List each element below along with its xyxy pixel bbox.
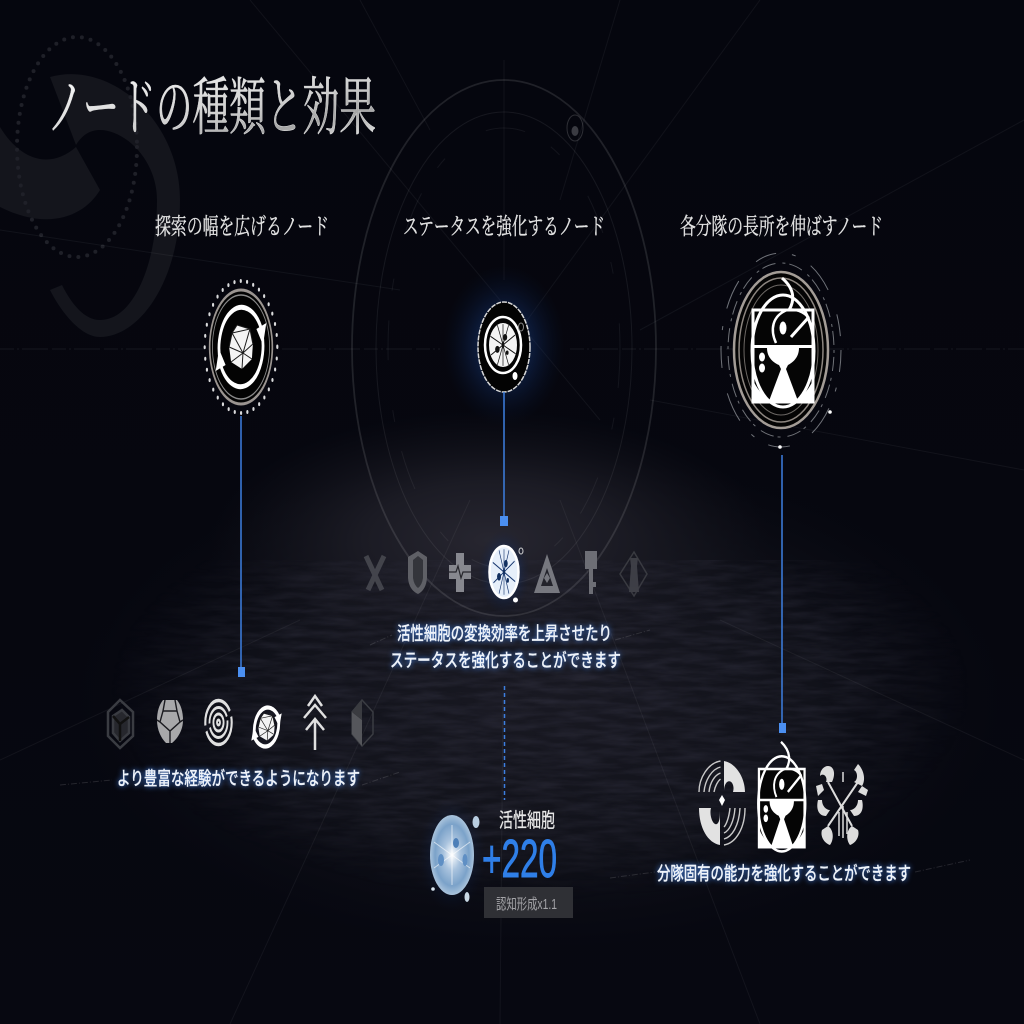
icon: status node — [444, 266, 564, 426]
text: status description: 活性細胞の変換効率を上昇させたり — [397, 623, 612, 644]
icon: selected compass — [478, 530, 530, 614]
text: status description: ステータスを強化することができます — [390, 650, 621, 671]
value: +220: +220 — [482, 829, 557, 889]
text: exploration description: より豊富な経験ができるようになります — [117, 768, 360, 789]
badge: cognition multiplier: 認知形成x1.1 — [496, 896, 557, 913]
badge: cognition multiplier — [484, 887, 573, 918]
background — [142, 437, 938, 892]
icon: exploration node — [205, 281, 277, 413]
icon: triangle eye — [534, 554, 560, 593]
icon: cycle polyhedron — [251, 708, 282, 746]
decorative swirl emblem — [0, 37, 180, 337]
heading: exploration nodes: 探索の幅を広げるノード — [155, 214, 329, 239]
icon: crossed curls — [816, 764, 868, 845]
connector: status — [500, 392, 508, 526]
text: squad description: 分隊固有の能力を強化することができます — [657, 863, 911, 884]
icon row: squad — [699, 742, 868, 851]
icon: hex box — [108, 700, 133, 748]
icon: target rings — [205, 700, 232, 744]
label: active cells: 活性細胞 — [499, 809, 555, 832]
icon: split emblem — [699, 761, 745, 845]
icon: chalice — [758, 742, 805, 851]
icon row: status — [366, 530, 647, 614]
reward: active cells — [418, 799, 573, 918]
icon: shield — [408, 551, 427, 594]
icon: tower in diamond — [620, 552, 647, 596]
icon: squad node — [721, 253, 841, 449]
title: ノードの種類と効果 — [47, 73, 376, 143]
heading: status nodes: ステータスを強化するノード — [403, 214, 605, 239]
icon: key — [585, 551, 597, 594]
connector: squad — [779, 455, 786, 733]
icon: upward arrow — [304, 696, 326, 750]
icon: cell orb — [418, 799, 486, 911]
text: status description — [390, 623, 621, 671]
icon: hex prism — [352, 700, 373, 746]
heading: squad nodes: 各分隊の長所を伸ばすノード — [680, 214, 883, 239]
icon: dodecahedron — [157, 700, 183, 743]
icon row: exploration — [108, 696, 373, 750]
connector: exploration — [238, 416, 245, 677]
connector: dashed to reward — [504, 686, 506, 800]
icon: crossed swords — [366, 556, 384, 590]
icon: medical cross — [449, 553, 471, 592]
